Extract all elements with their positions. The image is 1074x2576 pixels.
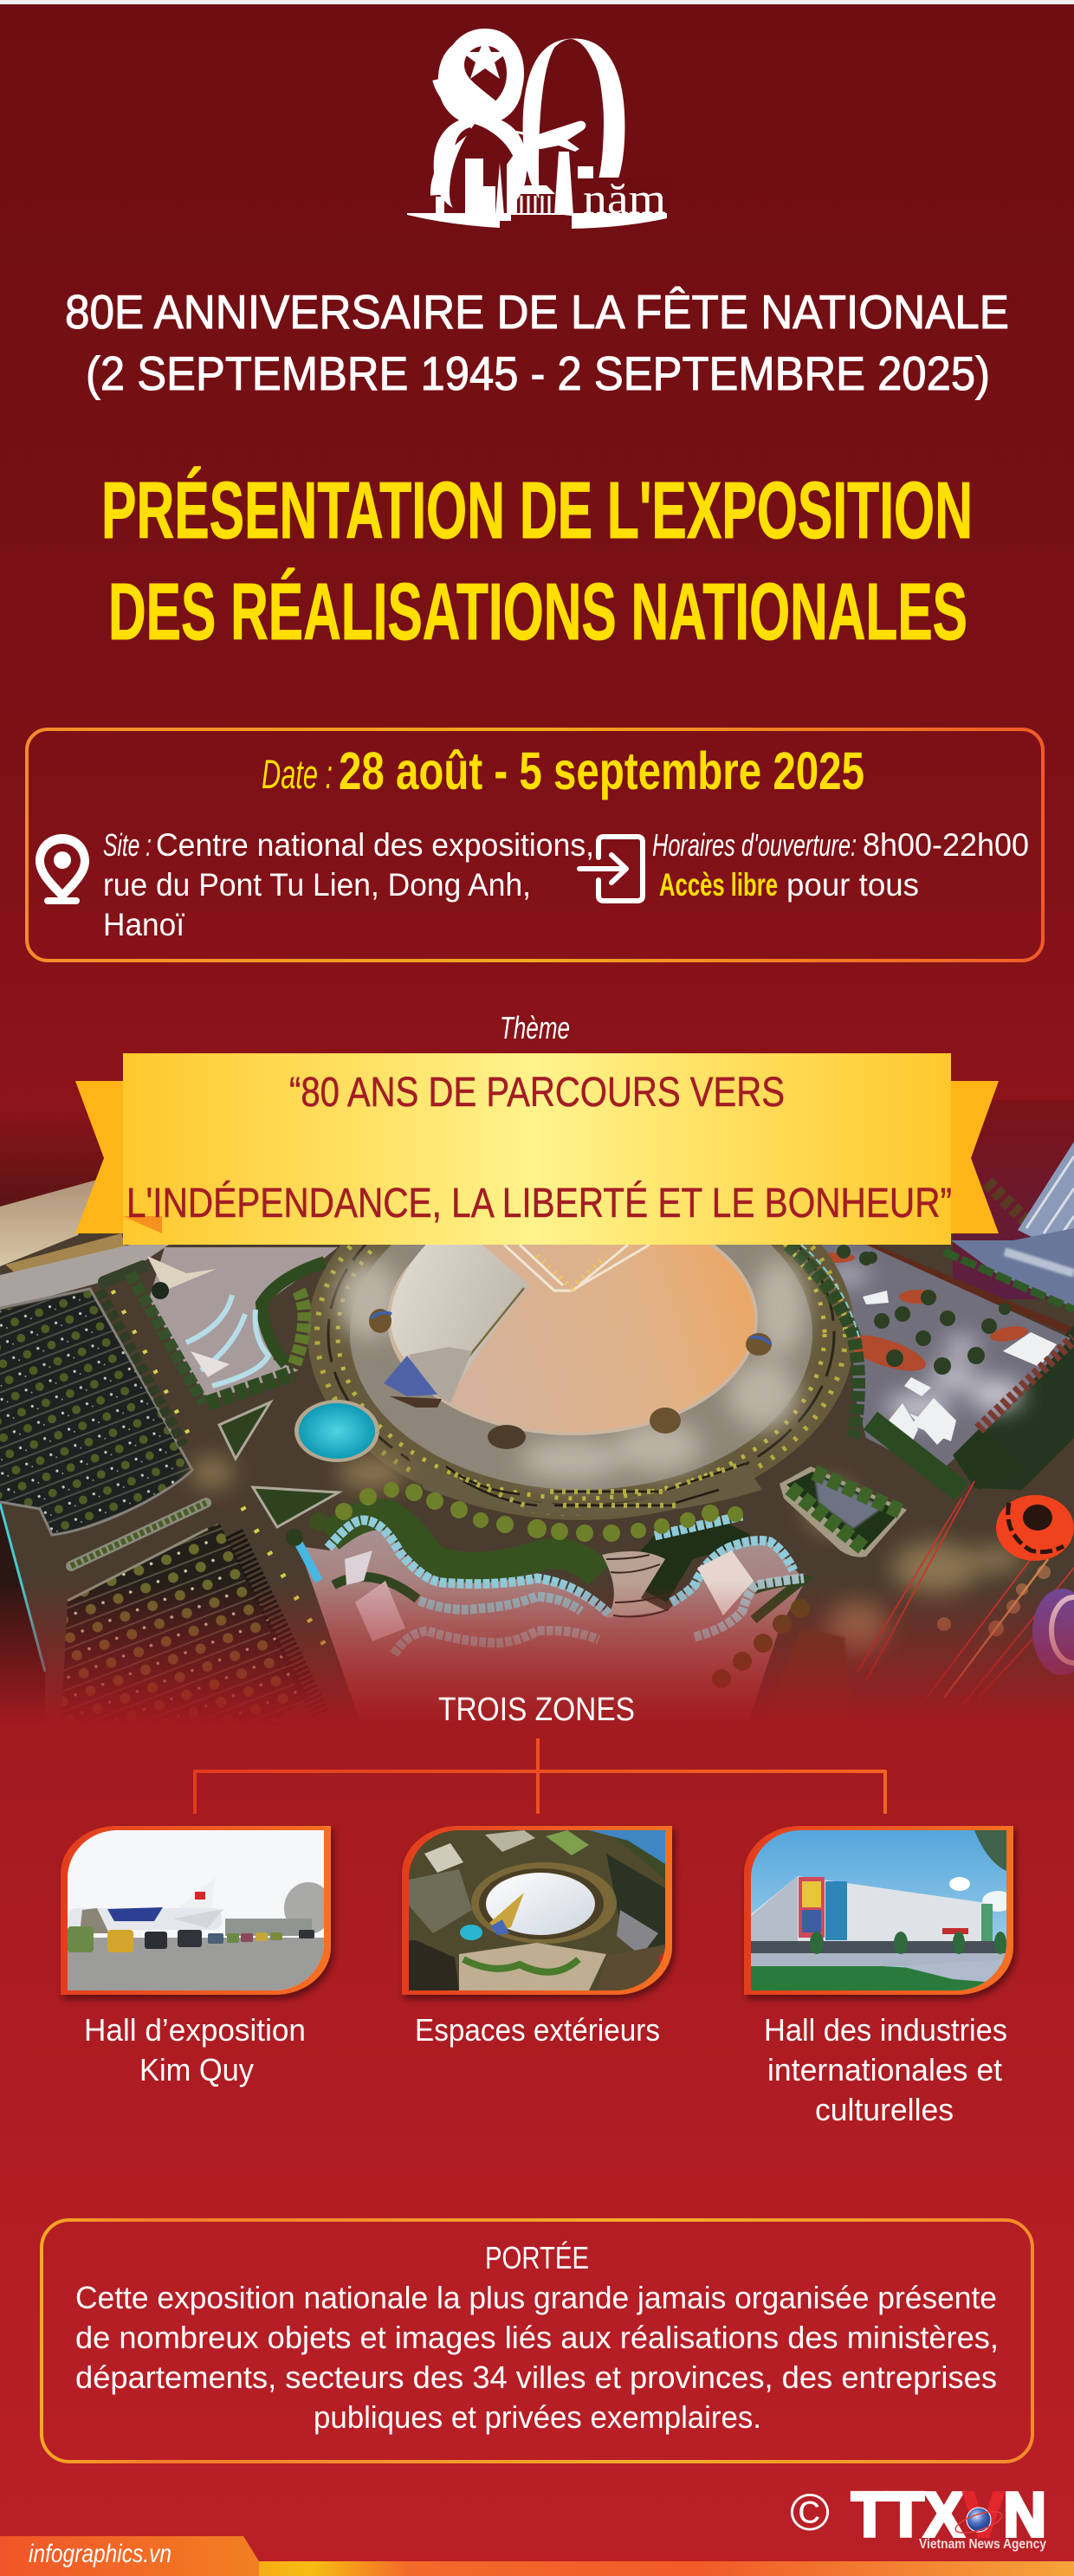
opening hours text: pour tous: [786, 867, 919, 903]
zone labels: Hall d’exposition: [84, 2012, 306, 2048]
site text: Hanoï: [103, 907, 185, 942]
scope text: de nombreux objets et images liés aux réalisations des ministères,: [75, 2320, 999, 2355]
icon: enter arrow: [579, 837, 643, 901]
bokeh lights: [937, 1565, 1051, 1636]
scope text: PORTÉE: [485, 2240, 589, 2275]
left parking: [0, 1291, 191, 1535]
pool: [294, 1400, 379, 1462]
dome pods: [369, 1309, 772, 1449]
zone labels: culturelles: [815, 2092, 954, 2127]
footer tab: infographics.vn: infographics.vn: [29, 2540, 171, 2568]
ribbon text: L'INDÉPENDANCE, LA LIBERTÉ ET LE BONHEUR”: [126, 1181, 952, 1227]
date line: Date :: [262, 751, 333, 797]
opening hours text: 8h00-22h00: [863, 827, 1029, 863]
logo: copyright and TTXVN: Vietnam News Agency: [919, 2537, 1046, 2552]
dome entrance: [409, 1347, 472, 1403]
heading: exhibition title: [101, 465, 973, 657]
opening hours text: [652, 827, 1029, 903]
tile bands: [328, 1516, 804, 1654]
tower: [1018, 1142, 1074, 1247]
icon: location pin: [36, 834, 89, 904]
card: Kim Quy hall photo: [61, 1826, 333, 1995]
east island: [780, 1466, 907, 1557]
logo: 80 years emblem: năm: [583, 174, 666, 223]
diagonal light trails: [857, 1481, 1074, 1706]
scope text: Cette exposition nationale la plus grande jamais organisée présente: [75, 2280, 997, 2315]
zone labels: internationales et: [767, 2052, 1002, 2087]
ribbon banner: theme: [75, 1053, 999, 1245]
stairs: [602, 1551, 667, 1618]
right plaza: [806, 1245, 1071, 1474]
date line: [262, 741, 864, 800]
pink garden: [305, 1530, 804, 1713]
aerial photo of the exhibition centre: [0, 1100, 1074, 1734]
logo: 80 years emblem: [407, 0, 670, 270]
panel: date, site and opening hours: [27, 729, 1043, 961]
ribbon text: “80 ANS DE PARCOURS VERS: [289, 1070, 785, 1116]
title: anniversary: (2 SEPTEMBRE 1945 - 2 SEPTEMBRE 2025): [86, 346, 990, 400]
zone labels: Kim Quy: [139, 2052, 254, 2087]
scope text: publiques et privées exemplaires.: [314, 2399, 761, 2435]
opening hours text: Accès libre: [659, 867, 778, 903]
label: theme: Thème: [500, 1010, 570, 1045]
logo: copyright and TTXVN: ©: [790, 2483, 830, 2541]
opening hours text: Horaires d'ouverture:: [652, 827, 857, 863]
site text: Site :: [103, 827, 152, 863]
plaza trees: [286, 1482, 743, 1546]
site text: Centre national des expositions,: [156, 827, 594, 863]
ribbon text: [126, 1070, 952, 1227]
panel: scope of the exhibition: [42, 2220, 1032, 2462]
left garden: [149, 1247, 338, 1401]
scope text: [75, 2240, 999, 2435]
footer bar: [0, 2561, 1074, 2576]
hot air balloon purple: [1032, 1589, 1074, 1675]
ring around dome: [307, 1245, 855, 1520]
card: international and cultural industries hall photo: [744, 1826, 1013, 1995]
heading: three zones: TROIS ZONES: [438, 1692, 635, 1728]
footer tab: infographics.vn: [0, 2536, 259, 2576]
site text: [103, 827, 594, 942]
hedges: [329, 1514, 599, 1575]
zone labels: [84, 2012, 1007, 2127]
dome: [388, 1245, 758, 1435]
tents: [345, 1550, 372, 1585]
west edge: [0, 1509, 45, 1694]
zone labels: Hall des industries: [764, 2012, 1007, 2048]
hot air balloon red: [996, 1495, 1074, 1561]
road glows: [191, 1455, 1022, 1654]
site text: rue du Pont Tu Lien, Dong Anh,: [103, 867, 531, 903]
zone labels: Espaces extérieurs: [415, 2012, 660, 2048]
logo: copyright and TTXVN: TTXVN: [851, 2481, 1046, 2550]
median strip: [71, 1503, 206, 1566]
connector lines: [195, 1738, 885, 1814]
lower parking: [61, 1523, 308, 1732]
title: anniversary: 80E ANNIVERSAIRE DE LA FÊTE NATIONALE: [65, 285, 1009, 339]
scope text: départements, secteurs des 34 villes et provinces, des entreprises: [75, 2359, 997, 2395]
title: anniversary: [65, 285, 1009, 400]
card: outdoor spaces photo: [402, 1826, 672, 1995]
triangle green islands: [219, 1402, 270, 1459]
bottom fade: [0, 1581, 1074, 1734]
date line: 28 août - 5 septembre 2025: [339, 741, 864, 800]
